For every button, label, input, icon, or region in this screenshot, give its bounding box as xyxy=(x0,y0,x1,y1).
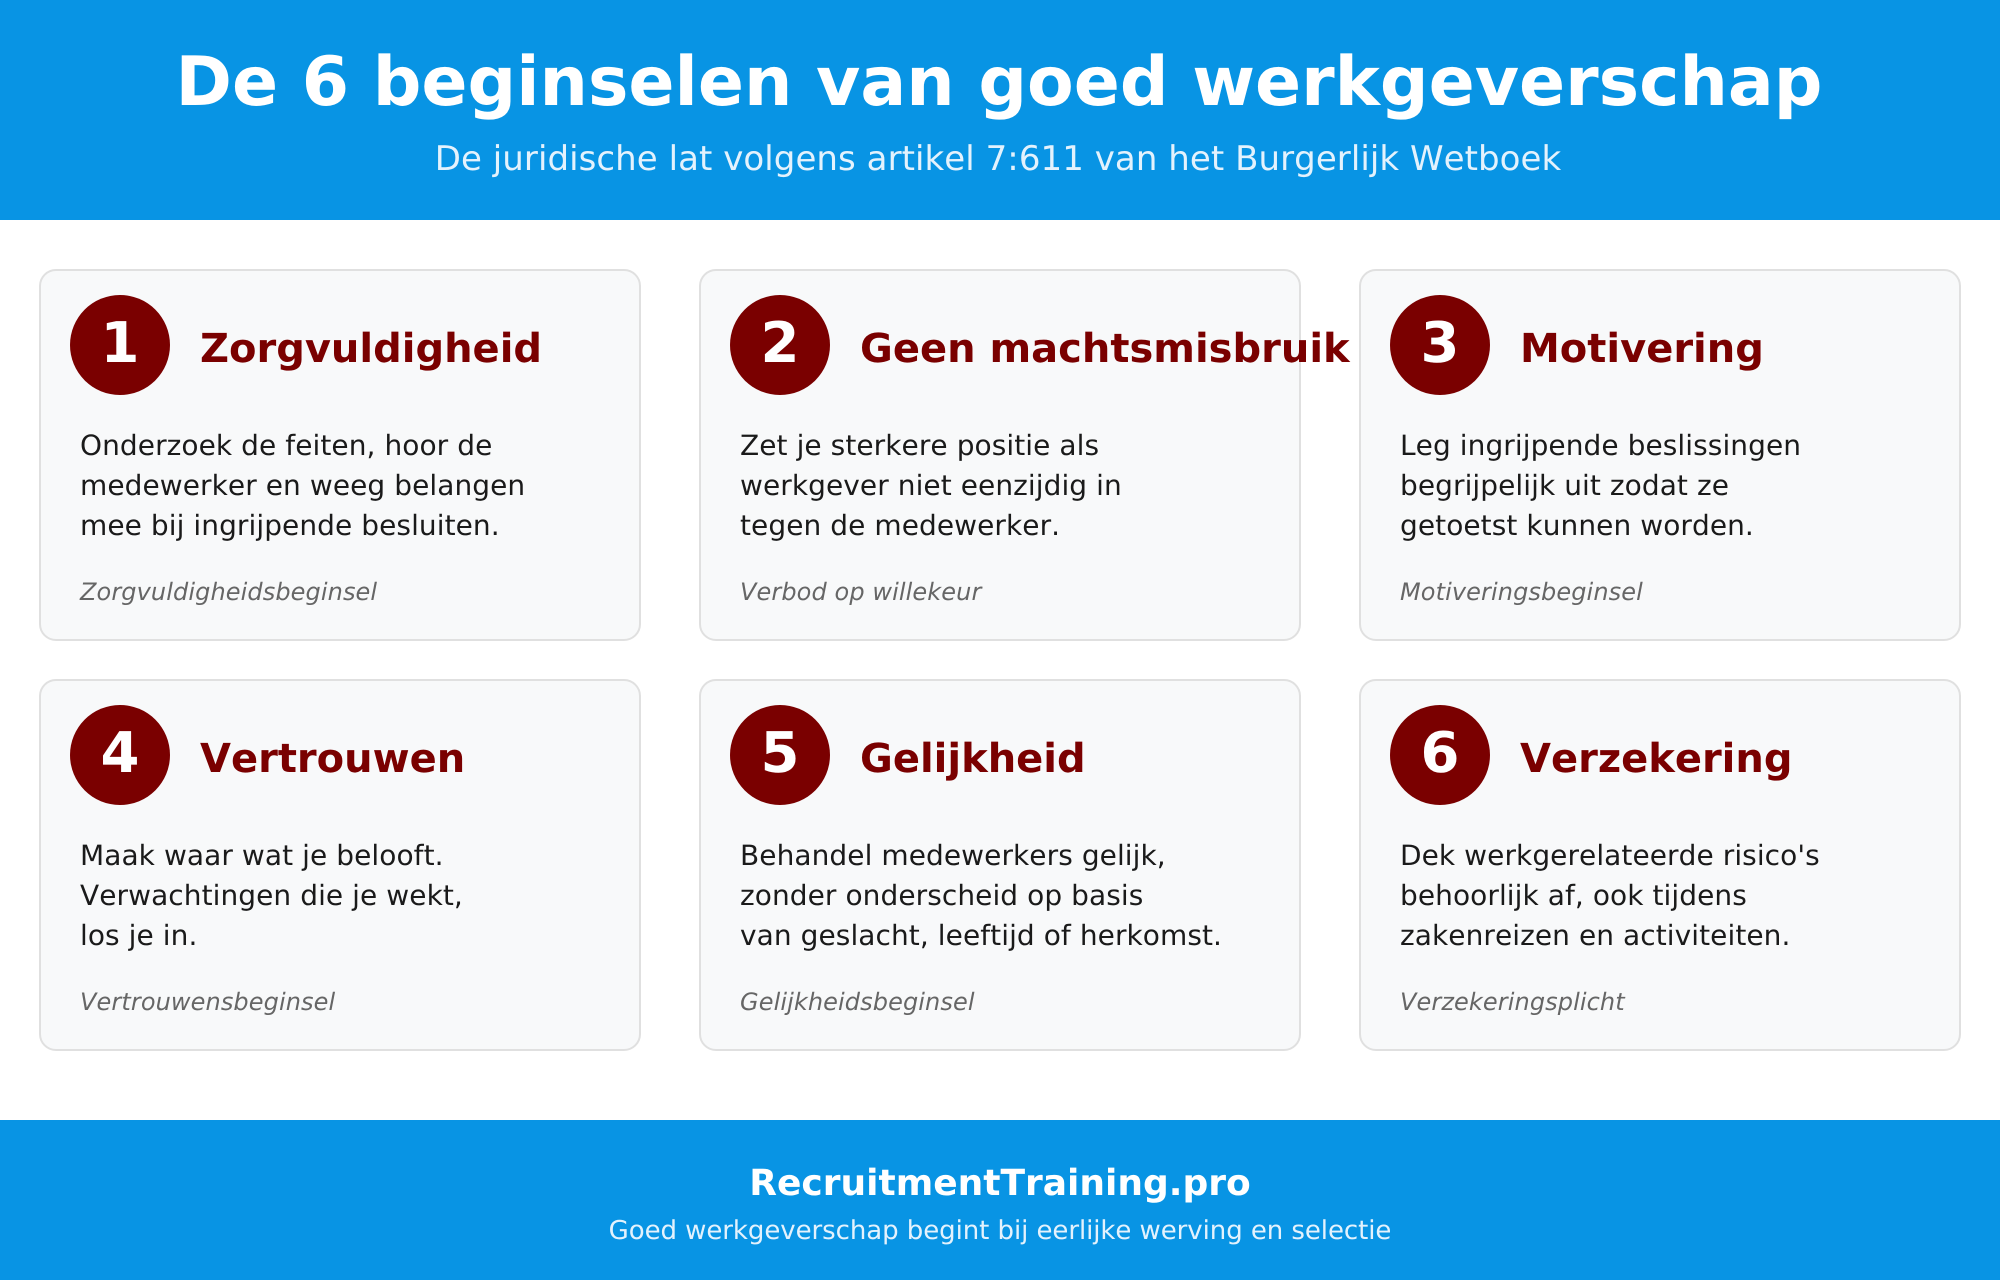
description 4 xyxy=(80,839,463,952)
panel: 6 Verzekering xyxy=(1359,679,1961,1051)
number badge 3: 3 xyxy=(1421,311,1459,376)
legal term 3: Motiveringsbeginsel xyxy=(1400,578,1643,606)
title: De 6 beginselen van goed werkgeverschap xyxy=(176,43,1822,122)
description 3: Leg ingrijpende beslissingen xyxy=(1400,429,1801,462)
panel: 5 Gelijkheid xyxy=(699,679,1301,1051)
panel: 4 Vertrouwen xyxy=(39,679,641,1051)
description 6: behoorlijk af, ook tijdens xyxy=(1400,879,1747,912)
description 5 xyxy=(740,839,1222,952)
description 1: Onderzoek de feiten, hoor de xyxy=(80,429,492,462)
subtitle: De juridische lat volgens artikel 7:611 van het Burgerlijk Wetboek xyxy=(435,139,1561,179)
legal term 1: Zorgvuldigheidsbeginsel xyxy=(80,578,377,606)
panel: 3 Motivering xyxy=(1359,269,1961,641)
number badge 4 xyxy=(70,705,170,805)
number badge 1 xyxy=(70,295,170,395)
legal term 5: Gelijkheidsbeginsel xyxy=(740,988,975,1016)
number badge 3 xyxy=(1390,295,1490,395)
number badge 6: 6 xyxy=(1421,721,1459,786)
description 6: zakenreizen en activiteiten. xyxy=(1400,919,1790,952)
description 6: Dek werkgerelateerde risico's xyxy=(1400,839,1820,872)
footer banner xyxy=(0,1120,2000,1280)
number badge 6 xyxy=(1390,705,1490,805)
number badge 5 xyxy=(730,705,830,805)
description 4: Maak waar wat je belooft. xyxy=(80,839,444,872)
heading 6: Verzekering xyxy=(1520,736,1792,782)
number badge 4: 4 xyxy=(101,721,139,786)
number badge 5: 5 xyxy=(761,721,799,786)
description 2: tegen de medewerker. xyxy=(740,509,1060,542)
number badge 1: 1 xyxy=(101,311,139,376)
description 1 xyxy=(80,429,525,542)
panel: 1 Zorgvuldigheid xyxy=(39,269,641,641)
description 1: medewerker en weeg belangen xyxy=(80,469,525,502)
description 4: los je in. xyxy=(80,919,197,952)
description 2: Zet je sterkere positie als xyxy=(740,429,1099,462)
description 3: begrijpelijk uit zodat ze xyxy=(1400,469,1729,502)
description 3: getoetst kunnen worden. xyxy=(1400,509,1754,542)
description 1: mee bij ingrijpende besluiten. xyxy=(80,509,500,542)
legal term 2: Verbod op willekeur xyxy=(740,578,981,606)
description 3 xyxy=(1400,429,1801,542)
description 5: Behandel medewerkers gelijk, xyxy=(740,839,1166,872)
number badge 2 xyxy=(730,295,830,395)
heading 4: Vertrouwen xyxy=(200,736,465,782)
legal term 4: Vertrouwensbeginsel xyxy=(80,988,335,1016)
heading 3: Motivering xyxy=(1520,326,1764,372)
legal term 6: Verzekeringsplicht xyxy=(1400,988,1625,1016)
number badge 2: 2 xyxy=(761,311,799,376)
description 2: werkgever niet eenzijdig in xyxy=(740,469,1122,502)
description 6 xyxy=(1400,839,1820,952)
header banner xyxy=(0,0,2000,220)
description 5: van geslacht, leeftijd of herkomst. xyxy=(740,919,1222,952)
heading 5: Gelijkheid xyxy=(860,736,1086,782)
description 4: Verwachtingen die je wekt, xyxy=(80,879,463,912)
footer tagline: Goed werkgeverschap begint bij eerlijke werving en selectie xyxy=(609,1216,1391,1246)
heading 1: Zorgvuldigheid xyxy=(200,326,542,372)
panel: 2 Geen machtsmisbruik xyxy=(699,269,1301,641)
footer brand: RecruitmentTraining.pro xyxy=(749,1163,1251,1204)
description 2 xyxy=(740,429,1122,542)
description 5: zonder onderscheid op basis xyxy=(740,879,1143,912)
heading 2: Geen machtsmisbruik xyxy=(860,326,1350,372)
